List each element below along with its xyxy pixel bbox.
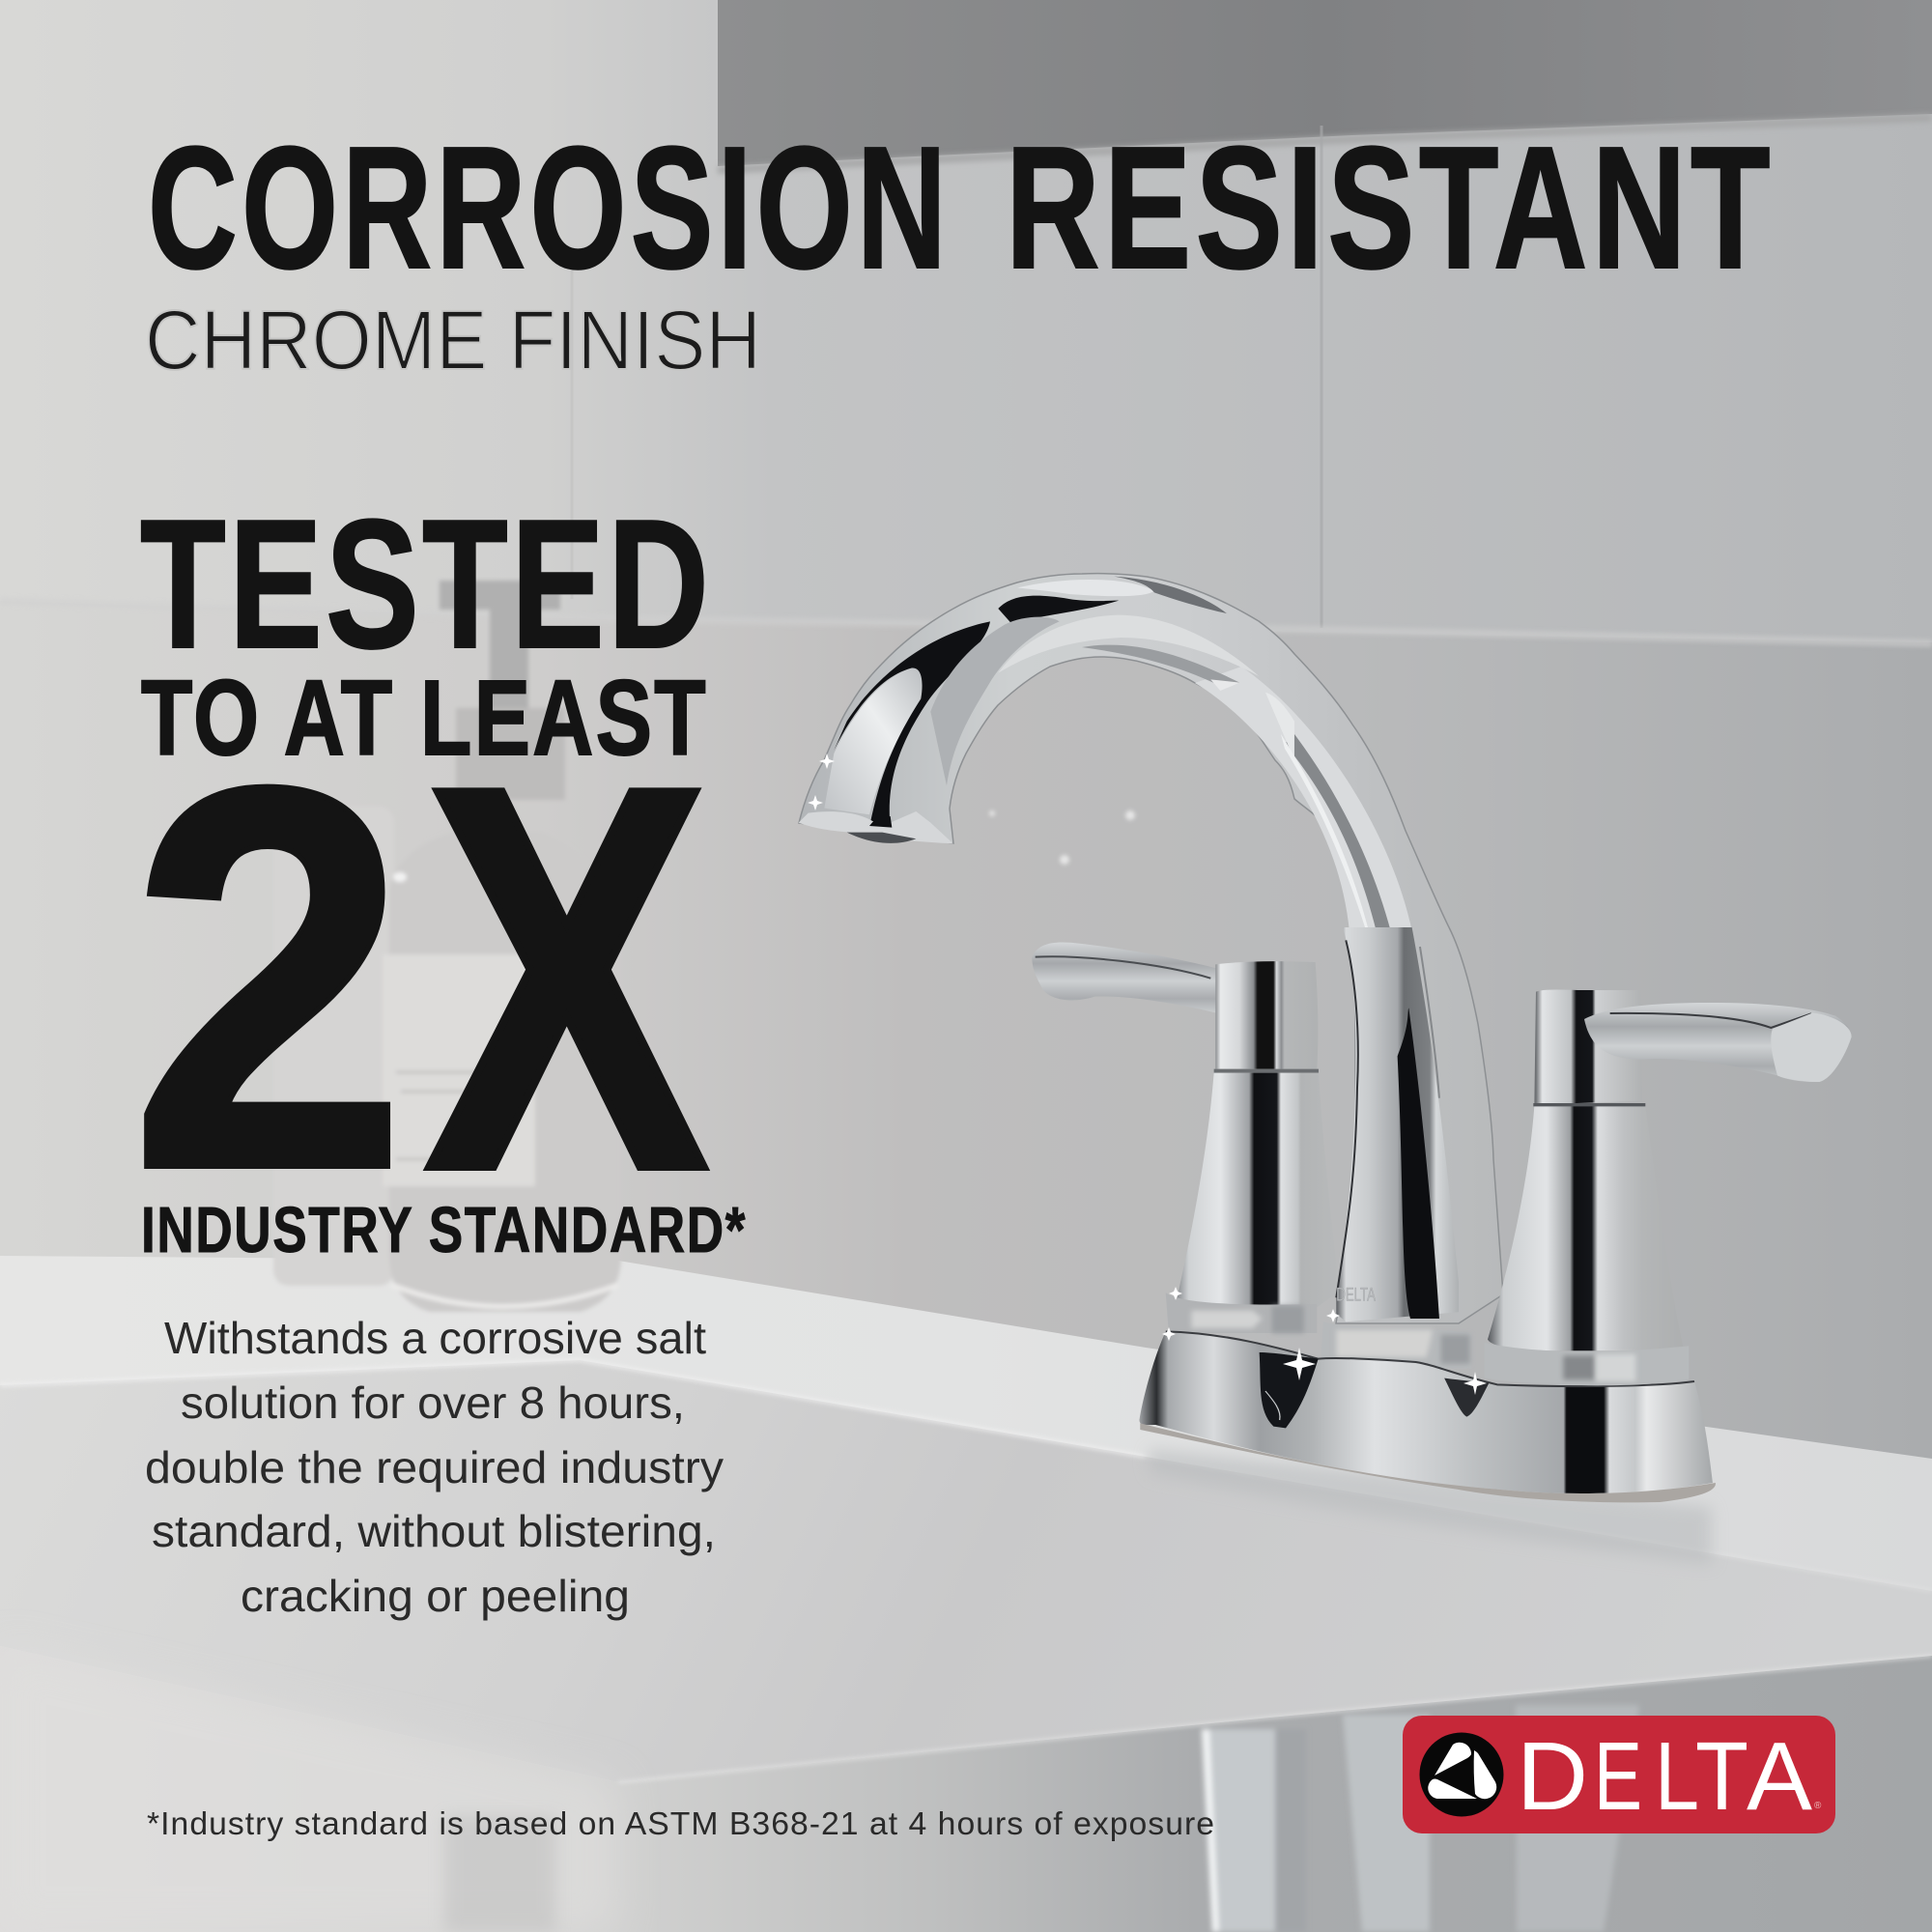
collar <box>1485 1343 1689 1385</box>
sparkles <box>808 753 1487 1395</box>
left notch <box>1260 1352 1319 1428</box>
2X: 2 <box>129 675 408 1282</box>
stem collar <box>1321 1321 1471 1369</box>
lower wall tiles <box>0 601 1932 1507</box>
faucet reflection in sink <box>1202 1705 1639 1932</box>
description <box>145 1313 724 1621</box>
registered mark: ® <box>1814 1801 1822 1811</box>
stem logo: DELTA <box>1336 1286 1376 1306</box>
description: Withstands a corrosive salt <box>164 1313 706 1363</box>
Delta logo <box>1403 1716 1835 1833</box>
2X <box>129 675 709 1282</box>
wordmark: A <box>1747 1722 1812 1831</box>
wordmark: T <box>1695 1722 1748 1831</box>
wordmark <box>1517 1722 1812 1831</box>
spout <box>799 574 1503 1323</box>
lever <box>1032 942 1220 1012</box>
description: solution for over 8 hours, <box>181 1378 685 1428</box>
2X: X <box>426 675 709 1282</box>
description: standard, without blistering, <box>152 1506 716 1556</box>
wordmark: D <box>1517 1722 1588 1831</box>
to at least: TO AT LEAST <box>141 659 708 778</box>
left handle <box>1032 942 1340 1333</box>
right handle <box>1485 989 1852 1385</box>
counter back surface <box>0 1256 1932 1787</box>
title <box>148 111 1775 305</box>
footnote: *Industry standard is based on ASTM B368-21 at 4 hours of exposure <box>147 1805 1215 1841</box>
industry standard: INDUSTRY STANDARD* <box>141 1194 747 1266</box>
bottle label <box>383 954 535 1186</box>
description: cracking or peeling <box>241 1571 630 1621</box>
cylinder <box>1215 961 1318 1069</box>
tested: TESTED <box>140 482 712 687</box>
lever <box>1584 1003 1852 1082</box>
center stem <box>1321 927 1471 1369</box>
counter front surface <box>0 1360 1932 1782</box>
logo mark <box>1420 1733 1503 1816</box>
cylinder <box>1534 989 1642 1104</box>
tube body chrome <box>1195 667 1412 932</box>
pump collar <box>456 708 565 800</box>
collar <box>1166 1293 1317 1333</box>
bottle body <box>389 832 621 1312</box>
gasket <box>1140 1423 1716 1502</box>
pump head <box>440 581 560 710</box>
reflection on counter <box>1150 1449 1712 1565</box>
rear bottle <box>273 807 394 1286</box>
mirror panel at top right <box>718 0 1932 166</box>
wordmark: E <box>1594 1722 1642 1831</box>
title: CORROSION <box>148 111 951 305</box>
subtitle: CHROME FINISH <box>145 294 761 387</box>
cone <box>1488 1106 1684 1350</box>
faucet base <box>1139 1331 1716 1502</box>
description: double the required industry <box>145 1442 724 1492</box>
soap bottles behind text <box>273 581 621 1312</box>
spout reflections <box>824 577 1294 828</box>
headline block <box>129 482 747 1282</box>
bottle highlight <box>393 872 407 882</box>
cone <box>1176 1073 1340 1307</box>
base body <box>1139 1331 1713 1493</box>
wordmark: L <box>1655 1722 1699 1831</box>
wall sparkles <box>989 810 1135 865</box>
faucet <box>799 574 1852 1565</box>
right notch <box>1444 1378 1489 1417</box>
nozzle <box>799 811 953 843</box>
base top edge <box>1166 1331 1694 1386</box>
sink below the counter <box>0 1646 1932 1932</box>
